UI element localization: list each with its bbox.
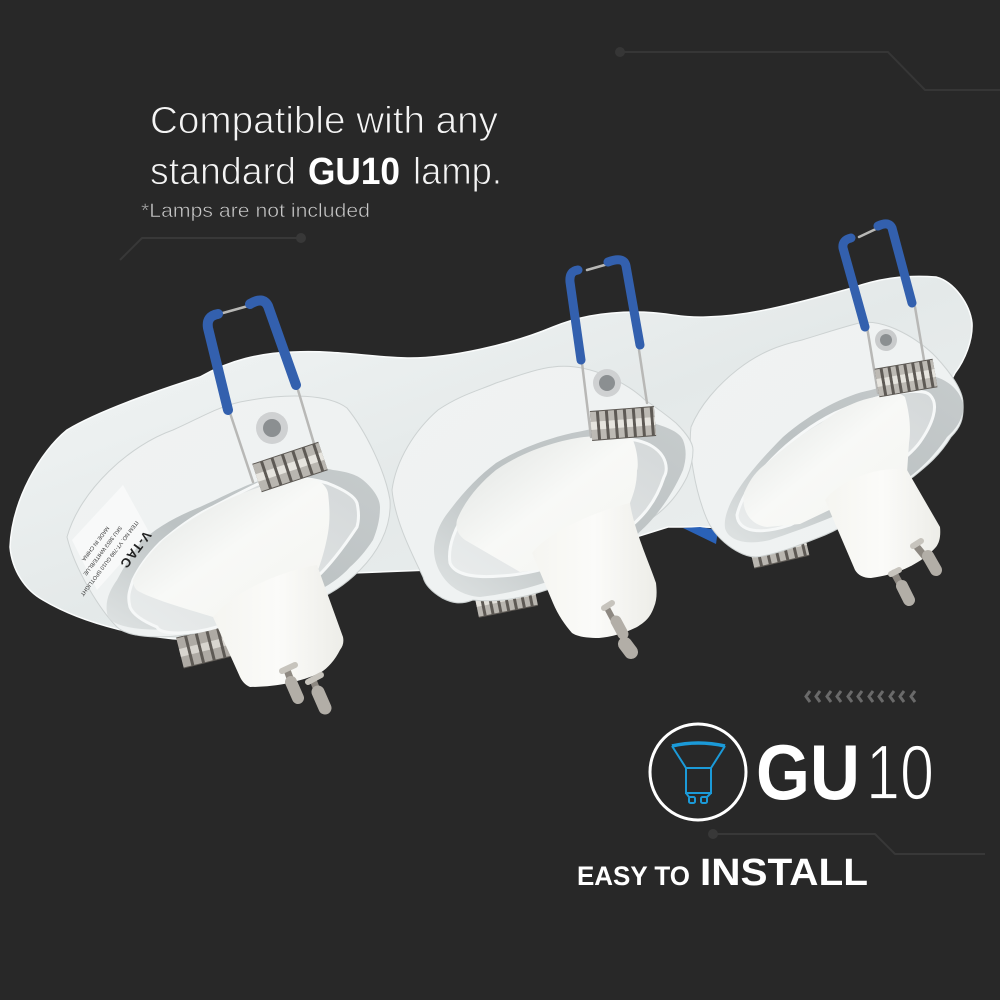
decorative circuit line: left	[120, 234, 305, 260]
screw 1	[256, 412, 288, 444]
inner rim 3	[737, 391, 935, 531]
chevron row	[806, 691, 915, 702]
screw 2	[593, 369, 621, 397]
pins 3	[891, 541, 936, 600]
heading: Compatible with any	[150, 100, 498, 142]
base 3	[825, 469, 940, 578]
pins 1	[282, 665, 325, 710]
upper spring 3	[877, 373, 935, 383]
base 1	[213, 565, 343, 687]
product label: SKU 3653 WHITE/BLUE	[81, 525, 123, 577]
lamp 2	[392, 260, 693, 652]
product photo illustration	[10, 224, 972, 710]
housing 2	[392, 366, 693, 603]
heading	[150, 100, 502, 193]
upper spring 1	[257, 456, 323, 478]
mounting plate	[10, 276, 972, 640]
housing 3	[690, 322, 963, 557]
decorative circuit line: top right	[616, 48, 1000, 90]
footnote: *Lamps are not included	[141, 200, 370, 222]
product label: MADE IN CHINA	[80, 525, 110, 562]
product label: V-TAC	[117, 528, 155, 572]
blue clip fragment behind plate	[683, 527, 718, 544]
pins 2	[604, 603, 631, 652]
lamp 1	[62, 300, 390, 710]
inner rim 1	[129, 478, 358, 633]
spring clip 1	[208, 300, 315, 482]
product label: ITEM NO. VT-789 GU10 SPOTLIGHT	[78, 519, 139, 597]
housing 1	[67, 396, 390, 637]
easy to install: EASY TO	[577, 861, 690, 891]
GU10 label: 10	[866, 728, 934, 816]
lower spring 3	[751, 541, 806, 554]
lower spring 1	[180, 640, 232, 653]
GU10 label	[756, 728, 934, 816]
cone 2	[456, 436, 638, 572]
cone 1	[133, 479, 330, 617]
screw 3	[875, 329, 897, 351]
easy to install: INSTALL	[700, 852, 868, 894]
decorative circuit line: bottom	[709, 830, 985, 854]
cone 3	[743, 394, 910, 527]
spring clip 3	[843, 224, 924, 393]
lower spring 2	[476, 591, 535, 603]
easy to install	[577, 852, 868, 894]
heading: standard	[150, 151, 296, 193]
upper spring 2	[591, 421, 655, 426]
product label	[62, 485, 156, 610]
housing inner opening 3	[725, 377, 963, 542]
heading: lamp.	[413, 151, 502, 193]
spring clip 2	[570, 260, 647, 437]
icon: GU10 bulb in circle	[650, 724, 746, 820]
lamp 3	[690, 224, 963, 600]
base 2	[532, 503, 657, 638]
GU10 label: GU	[756, 728, 860, 816]
housing inner opening 2	[434, 422, 686, 597]
housing inner opening 1	[107, 468, 380, 630]
heading: GU10	[308, 151, 400, 193]
inner rim 2	[450, 438, 666, 577]
